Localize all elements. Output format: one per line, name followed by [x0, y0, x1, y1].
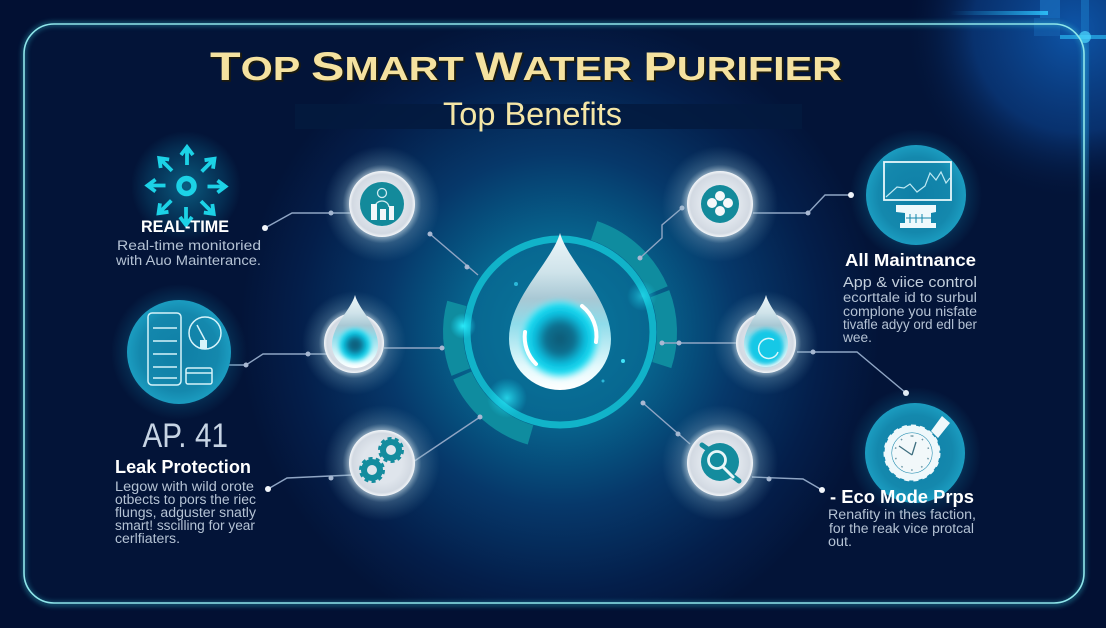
text block: real-time: REAL-TIME	[141, 218, 229, 236]
text block: all maintenance	[842, 250, 977, 345]
connector lines	[228, 192, 909, 493]
text block: all maintenance: complone you nisfate	[843, 304, 977, 319]
icon: monitor circle	[850, 129, 982, 261]
text block: all maintenance: All Maintnance	[845, 250, 976, 270]
text block: eco mode: for the reak vice protcal	[829, 521, 974, 536]
node: left drop	[302, 291, 406, 395]
text block: real-time: Real-time monitoried	[117, 238, 261, 253]
text block: leak protection: otbects to pors the riec	[115, 492, 256, 507]
node: gears	[324, 405, 440, 521]
text block: eco mode	[828, 486, 976, 549]
icon: app and gauge circle	[111, 284, 247, 420]
text block: all maintenance: wee.	[842, 330, 872, 345]
outer teal arc segments	[453, 231, 667, 435]
text block: leak protection: flungs, adguster snatly	[115, 505, 256, 520]
drop body	[509, 233, 611, 390]
text block: all maintenance: App & viice control	[843, 274, 977, 291]
subtitle band: Top Benefits	[443, 96, 622, 132]
text block: leak protection: Legow with wild orote	[115, 479, 254, 494]
text block: eco mode: Renafity in thes faction,	[828, 507, 976, 522]
value: AP. 41: AP.	[142, 417, 186, 455]
title: TOP SMART W ATER PURIFIER	[211, 46, 843, 90]
text block: eco mode: - Eco Mode Prps	[830, 486, 974, 507]
text block: leak protection: Leak Protection	[115, 457, 251, 477]
text block: real-time	[115, 218, 261, 268]
node: control	[662, 146, 778, 262]
value: AP. 41: 41	[195, 417, 228, 455]
text block: all maintenance: tivafle adyy ord edl ber	[843, 317, 977, 332]
ring sparkles	[450, 313, 476, 339]
node: right drop	[714, 291, 818, 395]
subtitle band	[295, 96, 802, 132]
drop highlights	[582, 306, 596, 342]
main ring	[467, 239, 653, 425]
central water drop emblem	[450, 231, 667, 435]
icon: real-time arrows	[131, 131, 241, 241]
text block: leak protection: cerlfiaters.	[115, 531, 180, 546]
node: search	[662, 405, 778, 521]
text block: eco mode: out.	[828, 534, 852, 549]
drop core	[519, 298, 601, 380]
icon: stopwatch circle	[849, 387, 981, 519]
text block: all maintenance: ecorttale id to surbul	[843, 290, 977, 305]
value: AP. 41	[142, 417, 228, 455]
title: TOP SMART W ATER PURIFIER	[210, 45, 842, 89]
text block: leak protection	[115, 457, 256, 546]
text block: leak protection: smart! sscilling for year	[115, 518, 255, 533]
text block: real-time: with Auo Mainterance.	[115, 253, 261, 268]
node: analytics	[324, 146, 440, 262]
